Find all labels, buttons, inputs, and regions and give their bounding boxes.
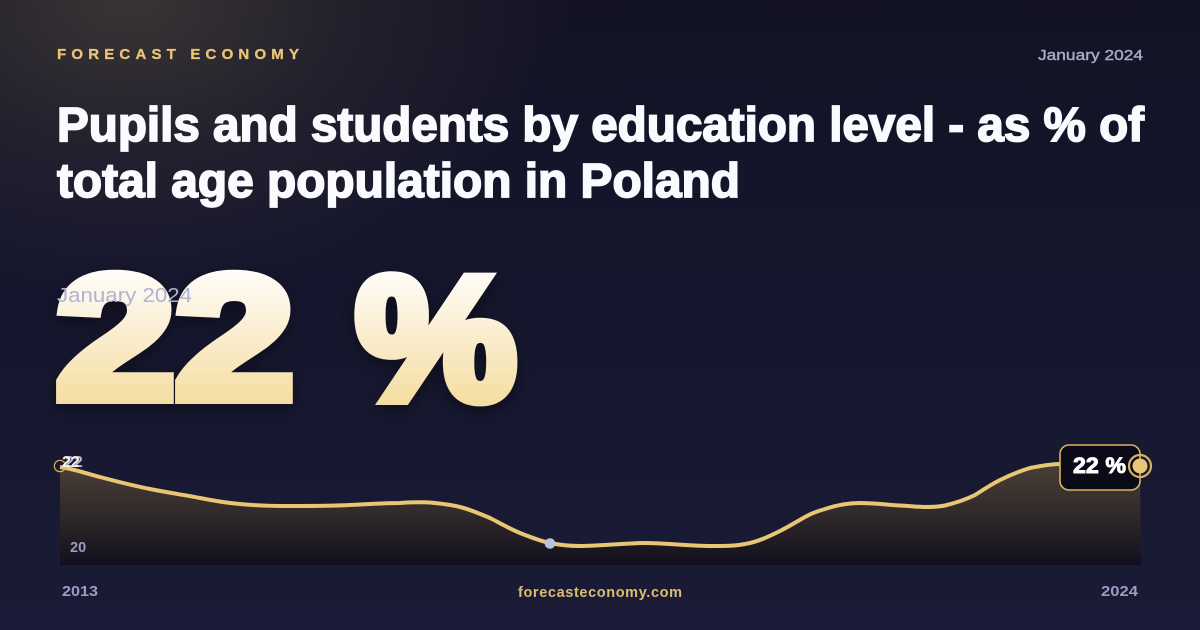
headline value: 22 <box>56 241 294 436</box>
area chart <box>60 464 1141 565</box>
brand label: FORECAST ECONOMY <box>57 46 299 63</box>
overlapping date label: January 2024 <box>57 285 192 307</box>
start year: 2013 <box>62 583 98 600</box>
chart line <box>60 464 1140 546</box>
callout: 22 % <box>1073 453 1126 478</box>
date top right: January 2024 <box>1038 47 1143 64</box>
end marker <box>1129 455 1151 477</box>
start value label: 22 <box>62 454 80 471</box>
title <box>57 99 1145 208</box>
website: forecasteconomy.com <box>518 585 682 601</box>
headline value: % <box>356 242 516 437</box>
title: total age population in Poland <box>57 155 740 208</box>
chart area fill <box>60 464 1141 565</box>
start marker <box>54 460 66 472</box>
minimum marker <box>545 538 555 549</box>
title: Pupils and students by education level - as % of <box>57 99 1145 152</box>
callout <box>1060 445 1140 490</box>
headline value <box>56 241 516 437</box>
axis min label: 20 <box>70 540 86 556</box>
end year: 2024 <box>1101 583 1139 600</box>
start value label: 22 <box>65 454 83 471</box>
